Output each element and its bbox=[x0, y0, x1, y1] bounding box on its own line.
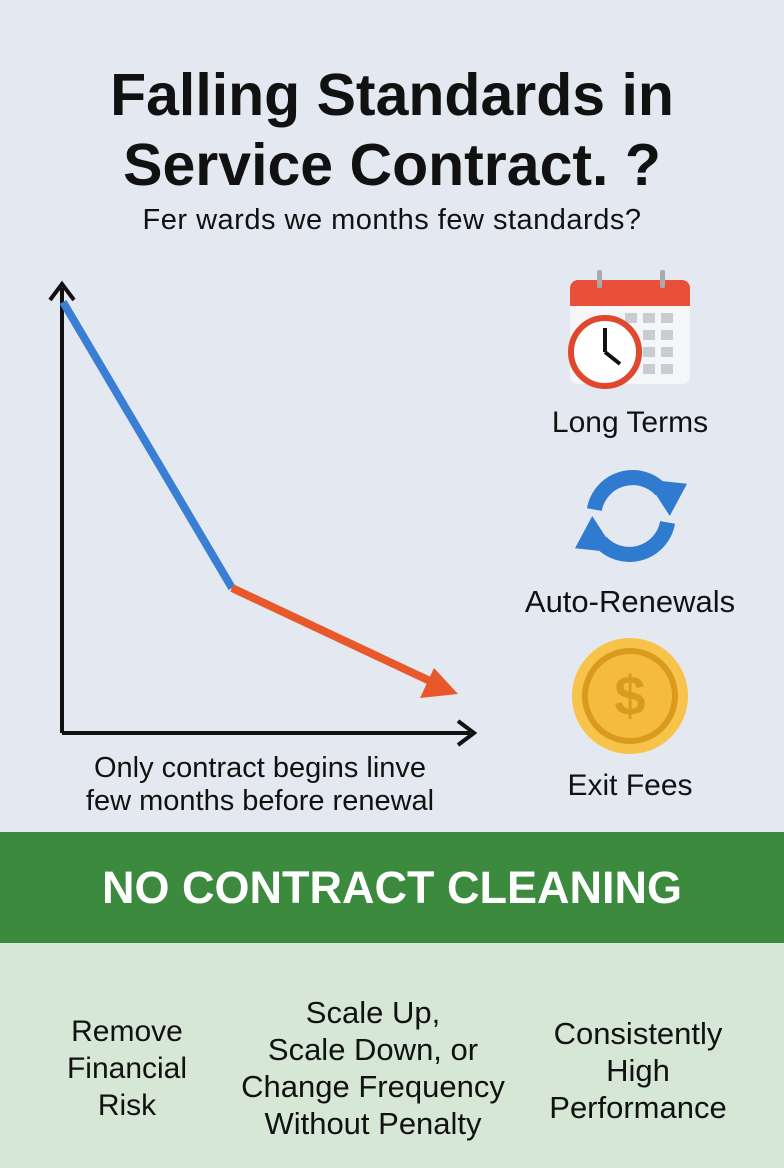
benefit: financial risk: Remove bbox=[71, 1015, 183, 1048]
chart caption bbox=[86, 752, 434, 817]
benefit: flexibility: Without Penalty bbox=[264, 1106, 482, 1141]
subtitle: Fer wards we months few standards? bbox=[143, 204, 641, 236]
green banner bbox=[0, 832, 784, 943]
benefit: flexibility: Scale Up, bbox=[306, 995, 440, 1030]
benefit: performance: Performance bbox=[549, 1090, 727, 1125]
icon: sync arrows bbox=[575, 470, 687, 562]
label: long terms: Long Terms bbox=[552, 406, 708, 439]
benefit: performance: High bbox=[606, 1053, 670, 1088]
title: Falling Standards in bbox=[110, 62, 674, 128]
label: exit fees: Exit Fees bbox=[567, 769, 693, 802]
benefit: financial risk bbox=[67, 1015, 187, 1122]
title: Service Contract. ? bbox=[123, 132, 661, 198]
benefit: flexibility bbox=[241, 995, 505, 1141]
benefit: flexibility: Scale Down, or bbox=[268, 1032, 478, 1067]
title bbox=[110, 62, 674, 198]
benefit: financial risk: Risk bbox=[98, 1089, 156, 1122]
benefit: performance bbox=[549, 1016, 727, 1125]
line chart bbox=[48, 280, 478, 747]
green banner: NO CONTRACT CLEANING bbox=[102, 862, 682, 913]
icon: coin bbox=[572, 638, 688, 754]
chart caption: Only contract begins linve bbox=[94, 752, 426, 784]
benefit: performance: Consistently bbox=[554, 1016, 722, 1051]
chart caption: few months before renewal bbox=[86, 785, 434, 817]
icon: coin: $ bbox=[614, 664, 646, 727]
panel: benefits bbox=[0, 943, 784, 1168]
benefit: financial risk: Financial bbox=[67, 1052, 187, 1085]
label: auto-renewals: Auto-Renewals bbox=[525, 584, 735, 619]
benefit: flexibility: Change Frequency bbox=[241, 1069, 505, 1104]
icon: calendar clock bbox=[568, 270, 690, 389]
